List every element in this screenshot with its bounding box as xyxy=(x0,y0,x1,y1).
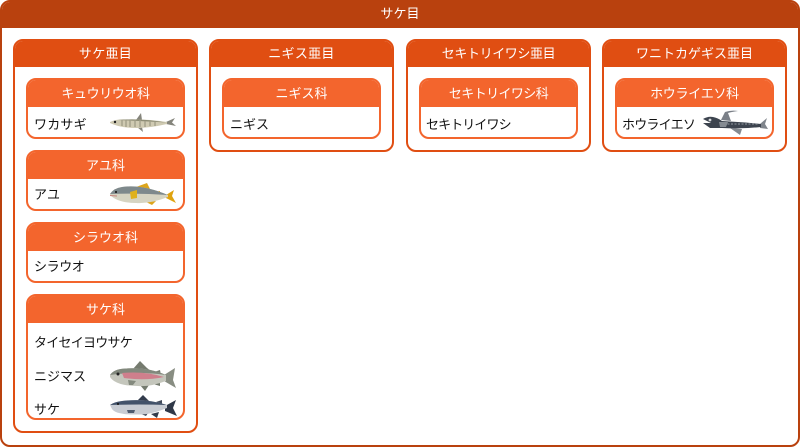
panel: アユ科 xyxy=(26,150,185,211)
icon: chum salmon xyxy=(110,395,177,418)
panel: ホウライエソ科 xyxy=(615,78,774,139)
label: ホウライエソ: ホウライエソ xyxy=(622,117,695,132)
heading: ニギス亜目 xyxy=(211,41,392,67)
icon: rainbow trout xyxy=(110,361,176,391)
panel: セキトリイワシ科 xyxy=(419,78,578,139)
heading: セキトリイワシ科 xyxy=(421,80,576,107)
heading: ワニトカゲギス亜目: ワニトカゲギス亜目 xyxy=(636,46,753,61)
heading: セキトリイワシ科: セキトリイワシ科 xyxy=(449,86,548,101)
panel: キュウリウオ科 xyxy=(26,78,185,139)
heading: アユ科: アユ科 xyxy=(86,158,125,173)
heading: セキトリイワシ亜目 xyxy=(408,41,589,67)
icon: viperfish xyxy=(703,110,768,135)
label: シラウオ: シラウオ xyxy=(34,259,84,274)
panel: ニギス亜目 xyxy=(209,39,394,152)
label: アユ: アユ xyxy=(34,187,60,202)
heading: シラウオ科: シラウオ科 xyxy=(73,230,138,245)
heading: アユ科 xyxy=(28,152,183,179)
heading: ニギス科 xyxy=(224,80,379,107)
panel: サケ科 xyxy=(26,294,185,420)
heading: キュウリウオ科: キュウリウオ科 xyxy=(61,86,150,101)
icon: ayu fish xyxy=(110,183,176,205)
panel: ワニトカゲギス亜目 xyxy=(602,39,787,152)
heading: サケ目: サケ目 xyxy=(380,6,420,21)
heading: サケ科: サケ科 xyxy=(86,302,125,317)
heading: シラウオ科 xyxy=(28,224,183,251)
heading: ニギス科: ニギス科 xyxy=(275,86,328,101)
panel: サケ亜目 xyxy=(13,39,198,433)
panel: ニギス科 xyxy=(222,78,381,139)
heading: サケ科 xyxy=(28,296,183,323)
label: ワカサギ: ワカサギ xyxy=(34,117,87,132)
label: タイセイヨウサケ: タイセイヨウサケ xyxy=(34,335,132,350)
heading: ホウライエソ科 xyxy=(617,80,772,107)
heading: ニギス亜目: ニギス亜目 xyxy=(268,46,335,61)
heading: ホウライエソ科: ホウライエソ科 xyxy=(650,86,739,101)
heading: キュウリウオ科 xyxy=(28,80,183,107)
label: ニジマス: ニジマス xyxy=(34,369,86,384)
heading: ワニトカゲギス亜目 xyxy=(604,41,785,67)
label: セキトリイワシ: セキトリイワシ xyxy=(426,117,511,132)
panel: シラウオ科 xyxy=(26,222,185,283)
icon: wakasagi fish xyxy=(110,113,176,132)
heading: サケ目 xyxy=(0,0,800,28)
heading: サケ亜目 xyxy=(15,41,196,67)
heading: サケ亜目: サケ亜目 xyxy=(79,46,132,61)
label: サケ: サケ xyxy=(34,402,60,417)
panel: セキトリイワシ亜目 xyxy=(406,39,591,152)
heading: セキトリイワシ亜目: セキトリイワシ亜目 xyxy=(442,46,555,61)
label: ニギス: ニギス xyxy=(230,117,269,132)
